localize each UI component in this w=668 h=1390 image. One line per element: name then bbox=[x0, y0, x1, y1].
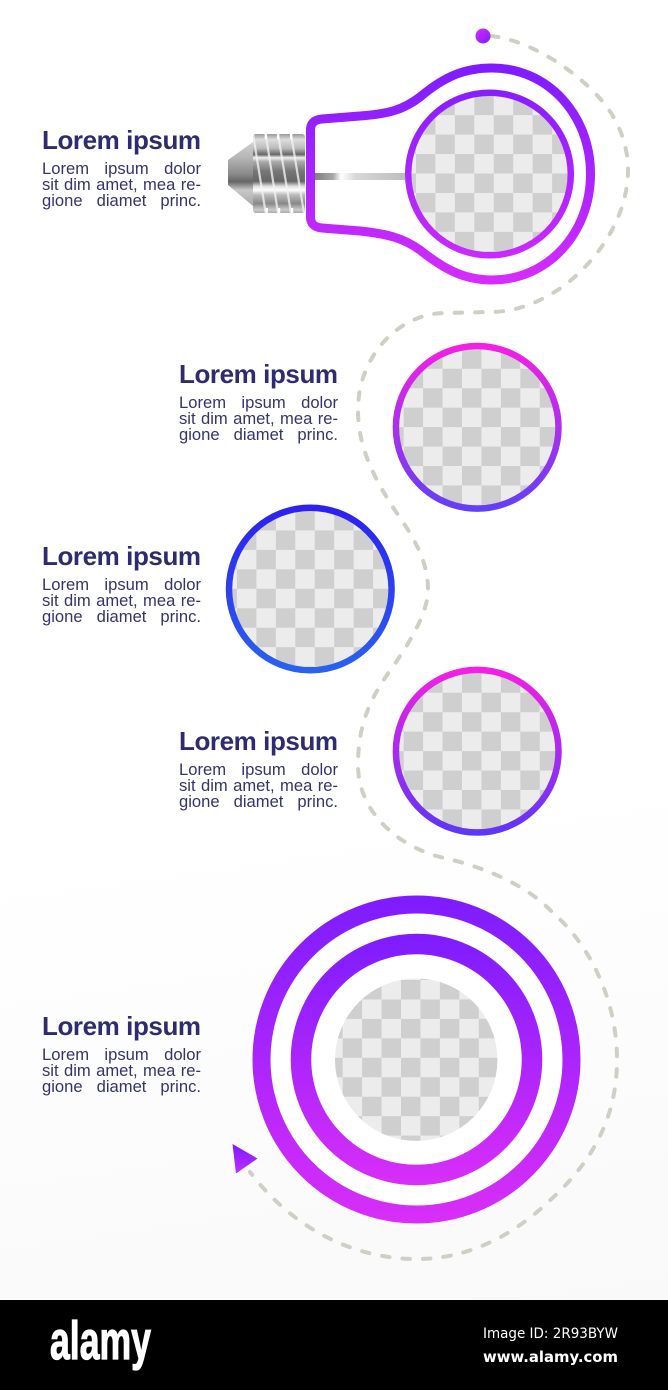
text block 5: sit dim amet, mea re- bbox=[42, 1061, 201, 1080]
text block 4: Lorem ipsum dolor bbox=[179, 760, 338, 778]
text block 3: Lorem ipsum dolor bbox=[42, 574, 201, 594]
footer logo: alamy bbox=[50, 1311, 151, 1371]
image placeholder circle 3 bbox=[229, 508, 392, 670]
text block 1 bbox=[42, 125, 201, 210]
footer bar bbox=[0, 1300, 668, 1390]
bulb outline bbox=[310, 68, 590, 280]
icon: start dot bbox=[476, 28, 490, 44]
text block 3 bbox=[42, 541, 201, 626]
text block 3: gione diamet princ. bbox=[42, 607, 201, 626]
arrowhead bbox=[232, 1144, 258, 1174]
icon: light bulb bbox=[228, 68, 590, 280]
text block 4: sit dim amet, mea re- bbox=[179, 776, 338, 795]
text block 1: sit dim amet, mea re- bbox=[42, 175, 201, 194]
footer image id: Image ID: 2R93BYW bbox=[483, 1326, 618, 1342]
text block 4: Lorem ipsum bbox=[179, 726, 338, 756]
text block 5: gione diamet princ. bbox=[42, 1077, 201, 1096]
image placeholder circle 4 bbox=[396, 670, 558, 832]
text block 3: sit dim amet, mea re- bbox=[42, 591, 201, 610]
dashed path connecting the steps bbox=[250, 36, 628, 1259]
text block 2: gione diamet princ. bbox=[179, 425, 338, 444]
bulb screw base bbox=[228, 134, 305, 213]
footer website: www.alamy.com bbox=[483, 1348, 618, 1366]
text block 2: sit dim amet, mea re- bbox=[179, 409, 338, 428]
text block 3: Lorem ipsum bbox=[42, 541, 201, 571]
text block 5 bbox=[42, 1011, 201, 1096]
text block 5: Lorem ipsum bbox=[42, 1011, 201, 1041]
text block 4 bbox=[179, 726, 338, 811]
text block 2: Lorem ipsum bbox=[179, 359, 338, 389]
text block 4: gione diamet princ. bbox=[179, 792, 338, 811]
bulb image placeholder circle bbox=[408, 93, 571, 255]
text block 1: Lorem ipsum dolor bbox=[42, 158, 201, 178]
concentric ring target bbox=[262, 904, 572, 1214]
text block 1: gione diamet princ. bbox=[42, 191, 201, 210]
text block 2 bbox=[179, 359, 338, 444]
bulb filament wire bbox=[315, 173, 405, 180]
text block 1: Lorem ipsum bbox=[42, 125, 201, 155]
text block 2: Lorem ipsum dolor bbox=[179, 392, 338, 412]
text block 5: Lorem ipsum dolor bbox=[42, 1044, 201, 1064]
image placeholder circle 2 bbox=[396, 346, 558, 509]
